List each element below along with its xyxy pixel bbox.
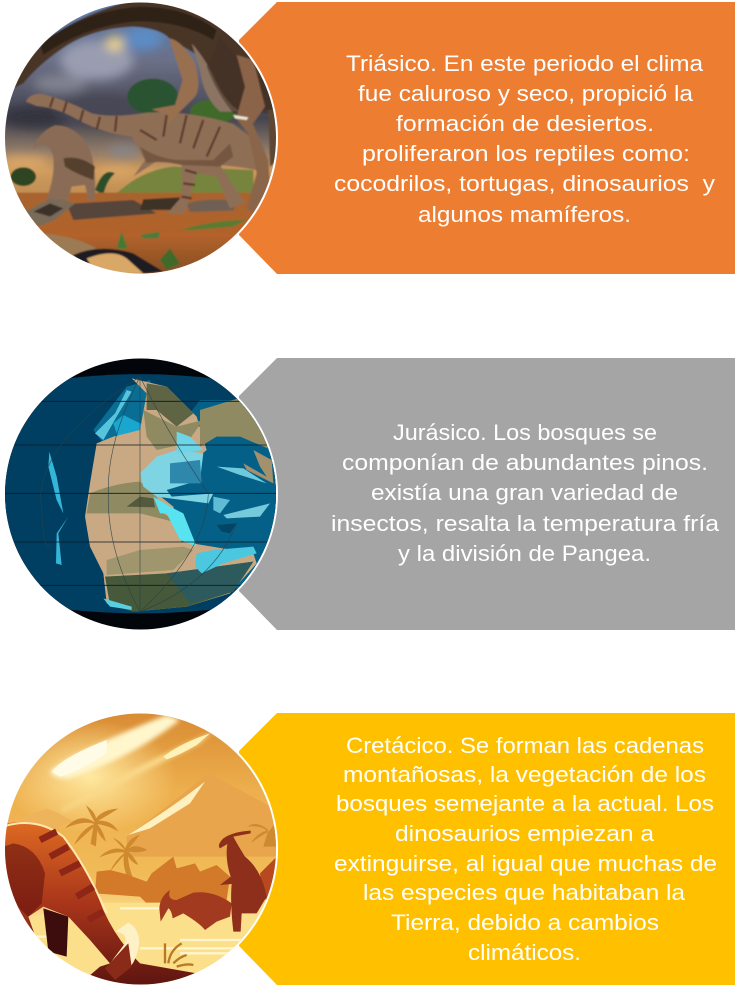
text: Cretácico description: las especies que habitaban la [363, 880, 686, 905]
small dinosaur [33, 125, 95, 200]
text: Triásico description: proliferaron los reptiles como: [362, 141, 690, 166]
panel: Cretácico [0, 710, 735, 987]
text: Triásico description: Triásico. En este periodo el clima [346, 51, 704, 76]
gray arrow box [239, 358, 735, 630]
panel: Triásico [0, 0, 735, 279]
text: Cretácico description: climáticos. [468, 940, 581, 965]
text: Jurásico description: componían de abundantes pinos. [342, 450, 708, 475]
land [85, 378, 257, 612]
text: Triásico description: cocodrilos, tortugas, dinosaurios y [334, 171, 716, 196]
reeds [165, 943, 193, 967]
circle image: Cretaceous extinction scene [0, 710, 290, 987]
text: Cretácico description: montañosas, la vegetación de los [343, 762, 706, 787]
small bird dinosaur [110, 922, 139, 966]
volcano [126, 787, 276, 857]
text: Jurásico description: y la división de Pangea. [398, 541, 651, 566]
ground [16, 192, 260, 274]
text: Cretácico description [334, 733, 717, 965]
graticule [0, 401, 290, 585]
text: Jurásico description: insectos, resalta la temperatura fría [331, 511, 720, 536]
coast [140, 450, 213, 503]
yellow arrow box [239, 713, 735, 985]
circle image: Pangea globe map [5, 358, 278, 630]
text: Triásico description: algunos mamíferos. [418, 202, 631, 227]
text: Jurásico description: Jurásico. Los bosques se [393, 420, 657, 445]
big foreground dinosaur [14, 2, 273, 114]
circle image: dinosaurs in Triassic landscape [5, 2, 278, 274]
text: Triásico description [334, 51, 716, 227]
text: Cretácico description: bosques semejante a la actual. Los [336, 791, 714, 816]
horned dinosaur [159, 890, 232, 930]
trees [127, 79, 178, 115]
shallow seas [94, 380, 150, 442]
large foreground dinosaur [0, 822, 197, 987]
text: Cretácico description: Cretácico. Se forman las cadenas [346, 733, 704, 758]
text: Jurásico description [331, 420, 720, 566]
text: Cretácico description: Tierra, debido a cambios [391, 910, 659, 935]
main dinosaur [26, 94, 265, 214]
orange arrow box [239, 2, 735, 274]
upright dinosaur [219, 831, 267, 932]
text: Triásico description: fue caluroso y seco, propició la [358, 81, 694, 106]
meteors [50, 715, 213, 812]
text: Cretácico description: dinosaurios empiezan a [395, 821, 655, 846]
panel: Jurásico [0, 350, 735, 640]
text: Triásico description: formación de desiertos. [396, 111, 654, 136]
water [33, 903, 277, 987]
text: Jurásico description: existía una gran variedad de [371, 480, 678, 505]
palms [65, 806, 276, 876]
text: Cretácico description: extinguirse, al igual que muchas de [334, 851, 717, 876]
